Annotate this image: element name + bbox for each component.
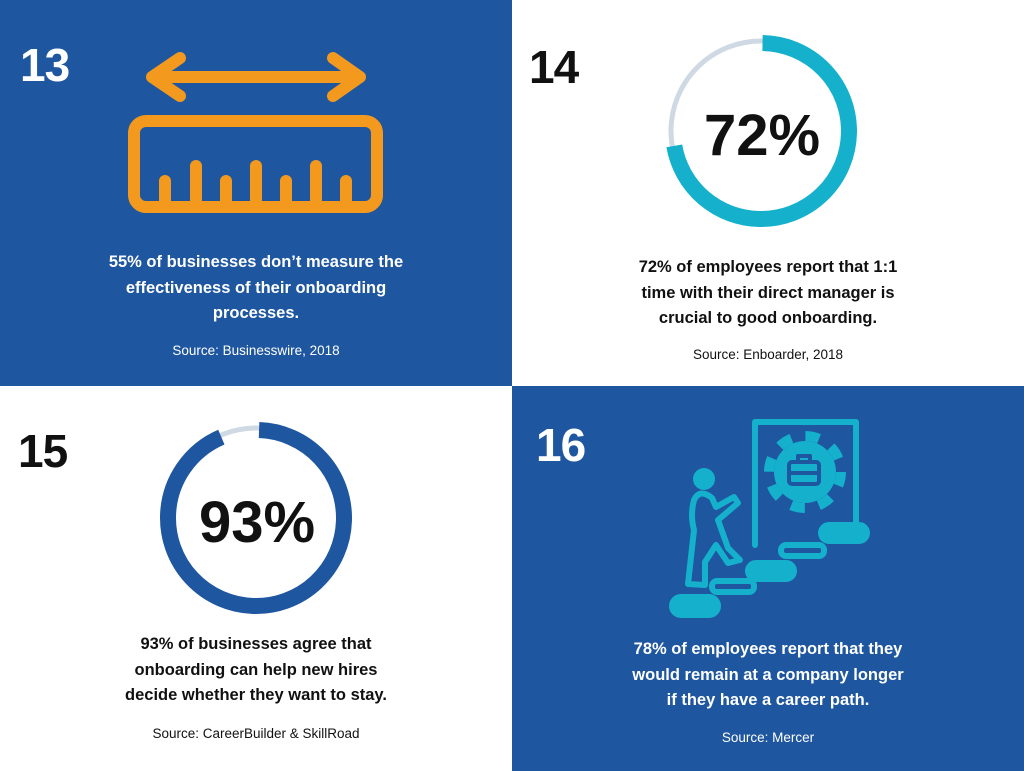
number 15: 15 (18, 425, 67, 477)
text block: decide whether they want to stay. (125, 686, 387, 704)
panel: 15 stay decision (18, 422, 387, 741)
panel: 13 measuring (0, 0, 512, 386)
chart: ring 72%: 72% (704, 103, 820, 168)
number 16: 16 (536, 419, 585, 471)
chart: ring 93% (160, 422, 352, 614)
number 14: 14 (529, 41, 578, 93)
icon: person climbing stairs to door (669, 419, 870, 618)
text block (632, 640, 904, 709)
text block: time with their direct manager is (641, 284, 895, 302)
text block: if they have a career path. (667, 691, 869, 709)
chart: ring 93%: 93% (199, 490, 315, 555)
source: Source: Mercer (722, 730, 814, 745)
panel: 16 career path (512, 386, 1024, 771)
icon: ruler with arrow (128, 52, 383, 213)
source: Source: Enboarder, 2018 (693, 347, 843, 362)
text block: effectiveness of their onboarding (126, 278, 386, 296)
text block: 78% of employees report that they (634, 640, 902, 658)
text block: processes. (213, 304, 299, 322)
source: Source: Businesswire, 2018 (172, 343, 340, 358)
text block: crucial to good onboarding. (659, 309, 877, 327)
text block: would remain at a company longer (632, 666, 904, 684)
text block: 55% of businesses don’t measure the (109, 253, 403, 271)
text block: 72% of employees report that 1:1 (639, 258, 897, 276)
text block: 93% of businesses agree that (140, 635, 372, 653)
panel: 14 manager time (529, 35, 897, 362)
text block (125, 635, 387, 704)
number 13: 13 (20, 39, 69, 91)
text block (639, 258, 897, 327)
text block: onboarding can help new hires (135, 660, 377, 678)
chart: ring 72% (666, 35, 857, 227)
source: Source: CareerBuilder & SkillRoad (152, 726, 360, 741)
text block (109, 253, 403, 322)
